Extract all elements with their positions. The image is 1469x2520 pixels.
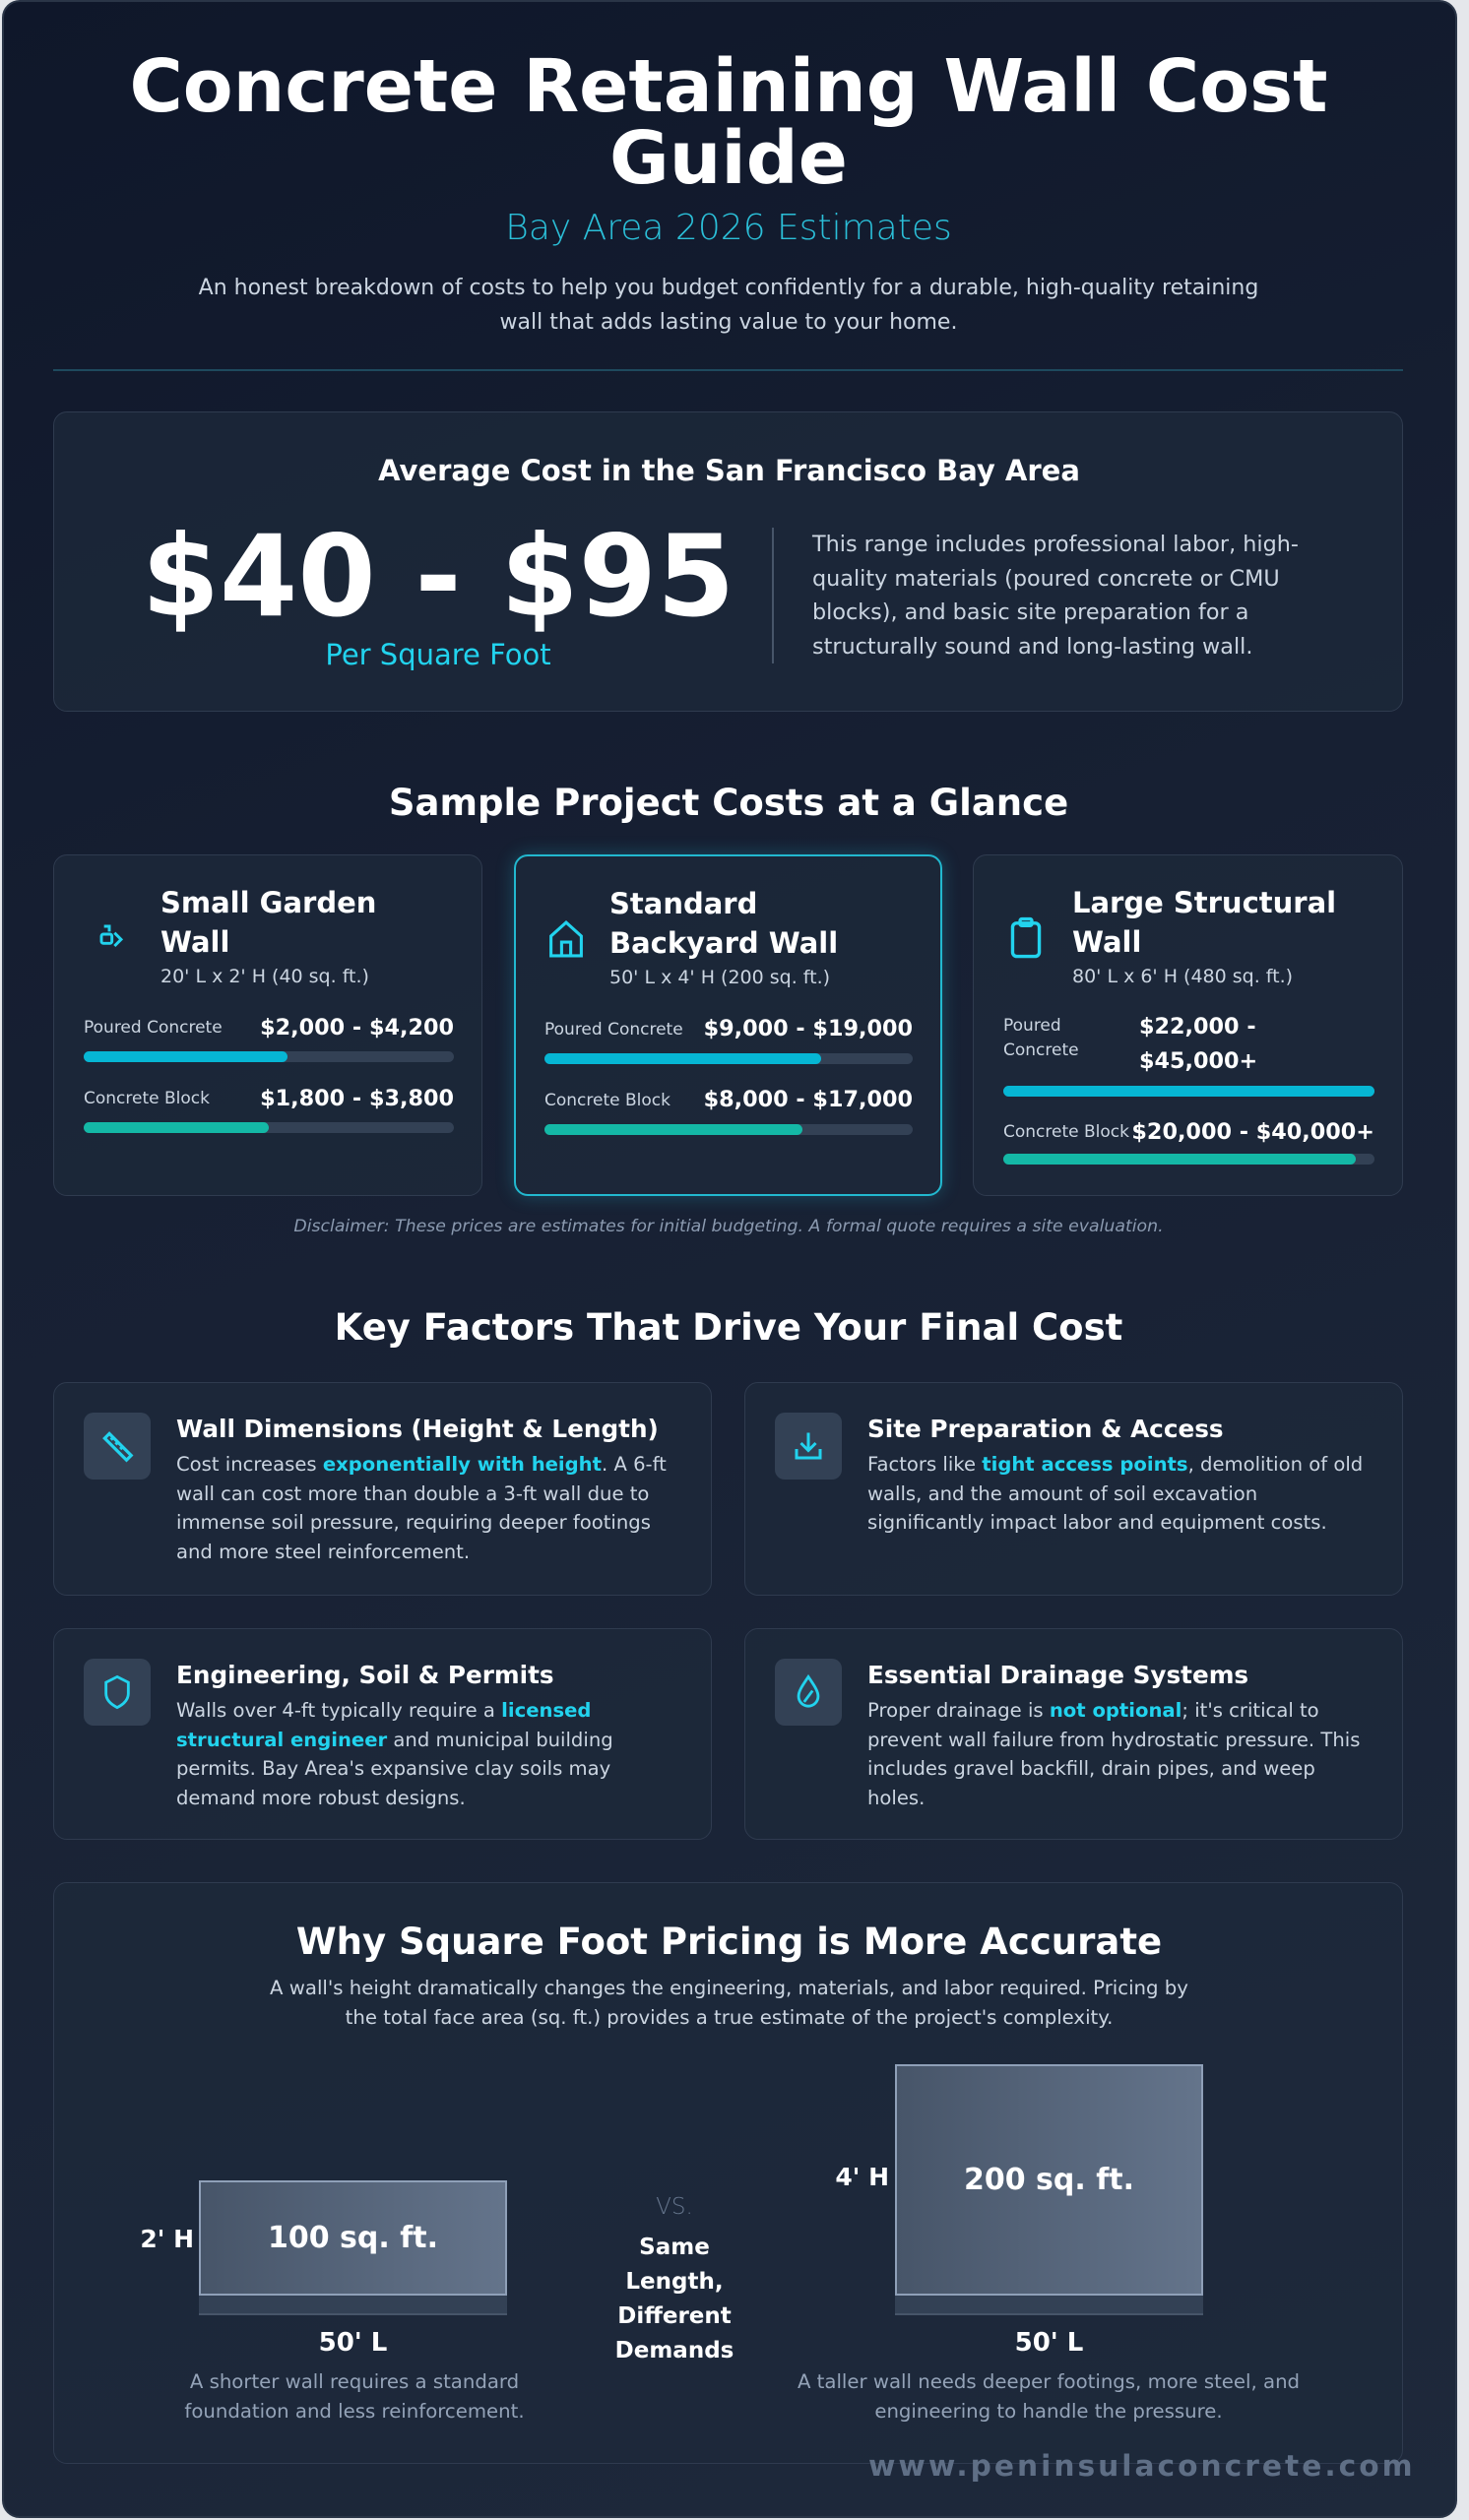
height label: 2' H: [140, 2225, 194, 2253]
vs label: VS.: [656, 2194, 693, 2220]
title: Guide: [609, 116, 848, 201]
length label: 50' L: [1015, 2328, 1083, 2358]
row: poured concrete: $2,000 - $4,200: [260, 1015, 454, 1040]
factor text: Cost increases exponentially with height. A 6-ft wall can cost more than double a 3-ft wall due to immense soil pressure, requiring deeper footings and more steel reinforcement.: [176, 1453, 667, 1563]
card title: Large Structural: [1072, 886, 1336, 919]
card title: Wall: [1072, 925, 1141, 959]
diagram: tall wall: [798, 2064, 1300, 2423]
row: poured concrete: Concrete: [1003, 1040, 1079, 1060]
watermark: www.peninsulaconcrete.com: [868, 2449, 1416, 2484]
row: concrete block: [544, 1087, 913, 1135]
factor: engineering: [53, 1628, 712, 1840]
row: poured concrete: Poured Concrete: [84, 1018, 223, 1038]
icon: ruler: [84, 1413, 151, 1480]
dimensions: 80' L x 6' H (480 sq. ft.): [1072, 966, 1293, 987]
row: concrete block: Concrete Block: [1003, 1122, 1129, 1142]
card title: Standard: [609, 887, 757, 920]
title: [130, 44, 1327, 201]
row: concrete block: Concrete Block: [84, 1089, 210, 1108]
disclaimer: Disclaimer: These prices are estimates for initial budgeting. A formal quote requires a site evaluation.: [293, 1217, 1164, 1236]
row: poured concrete: Poured Concrete: [544, 1020, 683, 1040]
factor title: Site Preparation & Access: [867, 1415, 1224, 1443]
card: large structural wall: [973, 854, 1403, 1196]
card title: [1072, 886, 1336, 959]
icon: shield: [84, 1659, 151, 1726]
card title: [609, 887, 838, 960]
wall block: 200 sq. ft.: [964, 2163, 1134, 2197]
row: concrete block: [84, 1086, 454, 1133]
comparison note: Same Length, Different Demands: [615, 2235, 734, 2363]
card: small garden wall: [53, 854, 482, 1196]
wall block: 100 sq. ft.: [268, 2221, 438, 2255]
row: poured concrete: Poured: [1003, 1016, 1061, 1036]
wall block: [895, 2064, 1203, 2296]
card: standard backyard wall: [514, 854, 942, 1196]
caption: A taller wall needs deeper footings, more steel, and engineering to handle the pressure.: [798, 2370, 1300, 2423]
factor title: Wall Dimensions (Height & Length): [176, 1415, 659, 1443]
icon: shovel: [100, 925, 123, 947]
factor: site preparation: [744, 1382, 1403, 1596]
panel: average cost: [53, 411, 1403, 712]
row: poured concrete: $45,000+: [1139, 1048, 1257, 1074]
card title: Small Garden: [160, 886, 376, 919]
big price: $40 - $95: [142, 511, 734, 642]
row: concrete block: $1,800 - $3,800: [260, 1086, 454, 1111]
icon: clipboard: [1010, 917, 1042, 959]
row: poured concrete: [1003, 1014, 1374, 1097]
intro text: An honest breakdown of costs to help you budget confidently for a durable, high-quality retaining wall that adds lasting value to your home.: [199, 276, 1258, 335]
height label: 4' H: [835, 2163, 889, 2191]
factor text: Factors like tight access points, demolition of old walls, and the amount of soil excavation significantly impact labor and equipment costs.: [867, 1453, 1363, 1534]
factor title: Engineering, Soil & Permits: [176, 1661, 554, 1689]
heading: average cost: Average Cost in the San Francisco Bay Area: [378, 454, 1080, 487]
factor: wall dimensions: [53, 1382, 712, 1596]
factor text: Proper drainage is not optional; it's critical to prevent wall failure from hydrostatic pressure. This includes gravel backfill, drain pipes, and weep holes.: [867, 1699, 1360, 1809]
dimensions: 50' L x 4' H (200 sq. ft.): [609, 967, 830, 988]
card title: Backyard Wall: [609, 926, 838, 960]
row: poured concrete: [544, 1016, 913, 1064]
wall block: [199, 2180, 507, 2296]
heading: Why Square Foot Pricing is More Accurate: [296, 1921, 1162, 1963]
factor text: Walls over 4-ft typically require a licensed structural engineer and municipal building permits. Bay Area's expansive clay soils may demand more robust designs.: [176, 1699, 613, 1809]
row: poured concrete: $22,000 -: [1139, 1014, 1256, 1040]
per square foot: Per Square Foot: [325, 638, 551, 671]
dimensions: 20' L x 2' H (40 sq. ft.): [160, 966, 369, 987]
row: poured concrete: [84, 1015, 454, 1062]
factor title: Essential Drainage Systems: [867, 1661, 1248, 1689]
explanation: A wall's height dramatically changes the engineering, materials, and labor required. Pricing by the total face area (sq. ft.) provides a true estimate of the project's complexity.: [270, 1977, 1188, 2029]
caption: A shorter wall requires a standard foundation and less reinforcement.: [184, 2370, 525, 2423]
card title: [160, 886, 376, 959]
diagram: short wall: [140, 2180, 525, 2423]
vs label: [615, 2194, 734, 2363]
subtitle: Bay Area 2026 Estimates: [505, 208, 952, 248]
range description: This range includes professional labor, high-quality materials (poured concrete or CMU blocks), and basic site preparation for a structurally sound and long-lasting wall.: [812, 532, 1299, 660]
icon: house: [549, 920, 583, 957]
panel: square foot pricing: [53, 1882, 1403, 2464]
icon: water drop: [775, 1659, 842, 1726]
factor: drainage: [744, 1628, 1403, 1840]
row: concrete block: $20,000 - $40,000+: [1131, 1119, 1374, 1145]
row: concrete block: [1003, 1119, 1374, 1165]
row: concrete block: $8,000 - $17,000: [704, 1087, 913, 1112]
row: poured concrete: $9,000 - $19,000: [704, 1016, 913, 1041]
length label: 50' L: [319, 2328, 387, 2358]
row: concrete block: Concrete Block: [544, 1091, 671, 1110]
icon: download tray: [775, 1413, 842, 1480]
heading: sample projects: Sample Project Costs at a Glance: [389, 782, 1068, 824]
title: Concrete Retaining Wall Cost: [130, 44, 1327, 129]
card title: Wall: [160, 925, 229, 959]
heading: key factors: Key Factors That Drive Your Final Cost: [335, 1306, 1122, 1349]
